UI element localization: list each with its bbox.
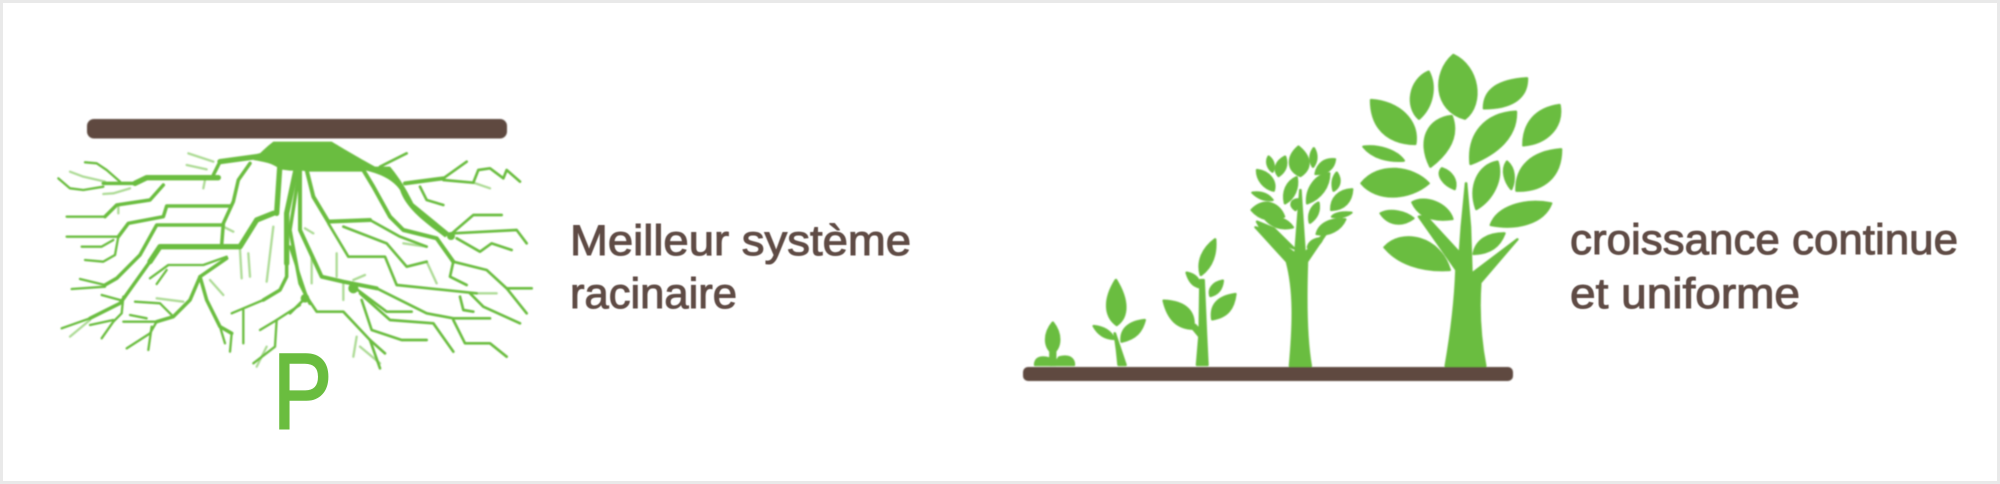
illustration: plants — [1035, 55, 1561, 366]
faint right root tips — [305, 183, 497, 363]
letter P: P — [273, 331, 332, 451]
thick left roots — [135, 152, 297, 263]
icon: right roots — [253, 142, 532, 368]
soil bar: plants — [1023, 367, 1513, 381]
root junction blobs — [301, 232, 455, 303]
tree: large — [1362, 55, 1561, 366]
root crown — [253, 142, 450, 237]
text: growth label: et uniforme — [1570, 270, 1800, 318]
thin right roots — [290, 153, 532, 368]
plant: young plant — [1164, 239, 1235, 365]
faint left root tips — [70, 153, 273, 367]
text: growth label — [1570, 216, 1958, 318]
plant: seedling — [1094, 280, 1145, 365]
panel: growth stages — [1023, 55, 1561, 381]
icon: left roots — [58, 152, 310, 367]
tree: medium — [1252, 147, 1352, 366]
medium left roots — [90, 162, 310, 333]
text: growth label: croissance continue — [1570, 216, 1958, 264]
text: root label: Meilleur système — [570, 217, 911, 265]
text: root label: racinaire — [570, 270, 737, 318]
medium right roots — [300, 167, 453, 288]
text: root label — [570, 217, 911, 318]
plant: sprout — [1035, 323, 1074, 365]
soil bar: roots — [87, 119, 507, 138]
thin left roots — [58, 162, 300, 363]
panel: root system — [58, 119, 532, 368]
